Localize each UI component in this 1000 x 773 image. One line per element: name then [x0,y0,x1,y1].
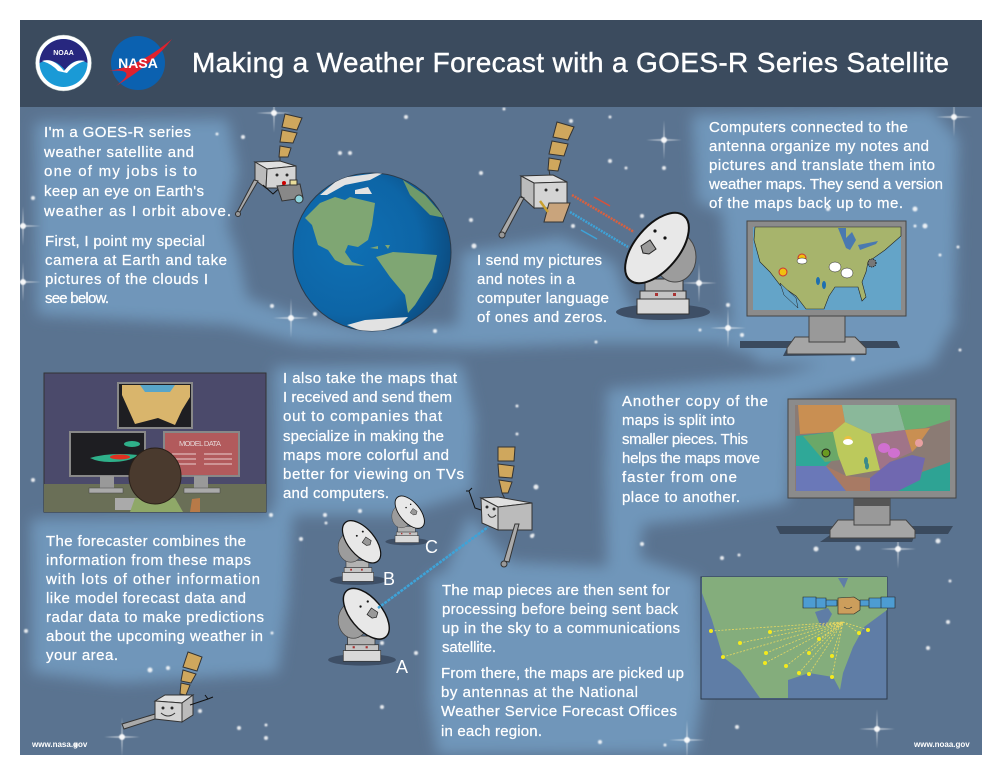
text: split maps: maps is split into [622,412,735,429]
text: forecaster: information from these maps [46,552,251,569]
text: intro: see below. [45,290,109,307]
monitor with weather map [740,221,906,356]
title: Making a Weather Forecast with a GOES-R Series Satellite [192,47,949,78]
antenna labels: A [396,657,408,677]
text: computers: of the maps back up to me. [709,195,903,212]
footer link: NASA: www.nasa.gov [31,740,88,749]
satellite bottom left [122,652,213,729]
text: send pictures: of ones and zeros. [477,309,607,326]
text: companies: I received and send them [283,389,452,406]
text: send pictures: and notes in a [477,271,576,288]
text: send pictures [477,252,609,326]
text: companies: specialize in making the [283,428,444,445]
antenna A [328,580,398,666]
stars [24,108,962,747]
satellite with camera [236,114,303,216]
text: forecaster: like model forecast data and [46,590,246,607]
text: forecaster: with lots of other information [45,571,260,588]
text: split maps: place to another. [622,489,740,506]
text: intro: weather satellite and [43,144,194,161]
text: intro [43,124,231,307]
text: map pieces: up in the sky to a communications [442,620,680,637]
antenna B [330,514,388,585]
text: forecaster: your area. [46,647,118,664]
text: computers: Computers connected to the [709,119,908,136]
NOAA logo: NOAA [53,50,74,57]
text: send pictures: I send my pictures [477,252,602,269]
text: forecaster: radar data to make predictions [46,609,264,626]
antenna labels: B [383,569,395,589]
map of forecast offices with satellite [701,577,895,699]
text: computers: pictures and translate them into [709,157,935,174]
text: computers: weather maps. They send a version [708,176,943,193]
text: split maps: smaller pieces. This [622,431,748,448]
text: map pieces: The map pieces are then sent for [442,582,670,599]
text: intro: weather as I orbit above. [43,203,231,220]
NOAA logo [36,35,92,91]
text: split maps [622,393,768,506]
antenna C [385,491,430,545]
text: companies: out to companies that [283,408,443,425]
Earth globe [293,172,451,335]
text: forecaster: The forecaster combines the [46,533,246,550]
text: forecaster [45,533,264,664]
text: computers [708,119,943,212]
text: companies: maps more colorful and [283,447,449,464]
forecaster scene [44,373,266,512]
text: map pieces: Weather Service Forecast Offices [441,703,677,720]
blue data stream to satellite [378,527,488,608]
antenna labels: C [425,537,438,557]
text: map pieces: satellite. [442,639,496,656]
text: forecaster: about the upcoming weather in [46,628,263,645]
glowing cloud blobs behind text [34,112,955,752]
satellite with clipboard [499,122,574,238]
text: intro: one of my jobs is to [44,163,197,180]
text: split maps: faster from one [622,469,737,486]
text: companies [283,370,464,502]
text: map pieces [441,582,684,740]
text: map pieces: processing before being sent back [442,601,678,618]
text: companies: better for viewing on TVs [283,466,464,483]
text: map pieces: by antennas at the National [441,684,638,701]
text: split maps: helps the maps move [622,450,760,467]
text: intro: camera at Earth and take [45,252,227,269]
large antenna [613,202,710,320]
forecaster scene: MODEL DATA [179,439,221,448]
NASA logo: NASA [118,55,158,71]
relay satellite [466,447,532,567]
text: intro: pictures of the clouds I [45,271,208,288]
text: split maps: Another copy of the [622,393,768,410]
text: send pictures: computer language [477,290,609,307]
text: map pieces: in each region. [441,723,542,740]
data stream: red and blue bits [570,195,634,247]
text: computers: antenna organize my notes and [709,138,929,155]
antenna labels [383,537,438,677]
text: intro: keep an eye on Earth's [44,183,204,200]
footer link: NOAA: www.noaa.gov [913,740,970,749]
text: companies: I also take the maps that [283,370,458,387]
text: companies: and computers. [283,485,389,502]
text: intro: I'm a GOES-R series [44,124,191,141]
NASA logo [109,36,172,90]
text: map pieces: From there, the maps are picked up [441,665,684,682]
header band [20,20,982,107]
monitor with split map [776,399,956,542]
text: intro: First, I point my special [45,233,205,250]
